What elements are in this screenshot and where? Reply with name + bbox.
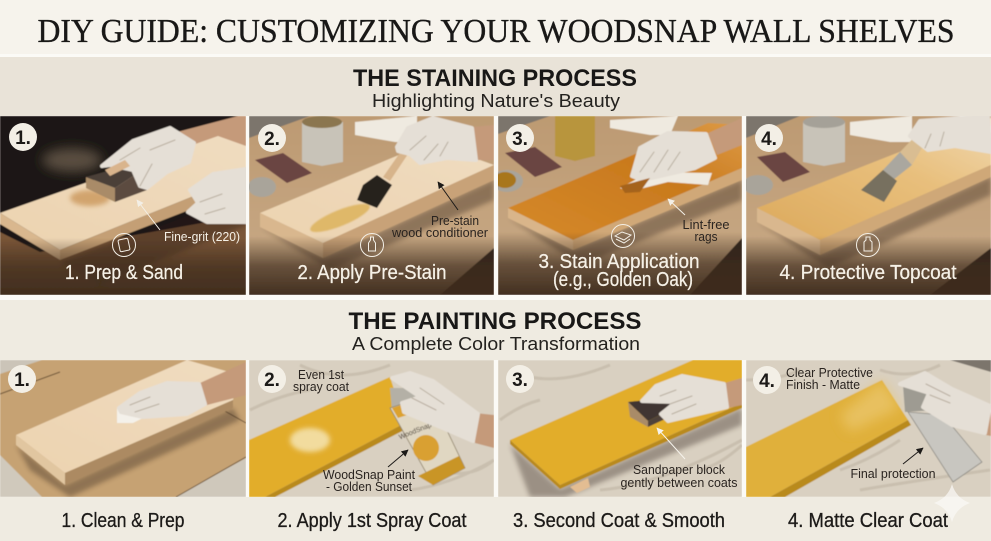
badge: step number: 4. (759, 371, 775, 392)
panel: painting step 2, apply first spray coat: WoodSnap (398, 422, 433, 441)
badge: step number (506, 365, 534, 393)
panel: staining step 1, prep and sand (0, 116, 246, 295)
badge: step number: 1. (15, 128, 31, 149)
icon: brush and can (856, 234, 880, 256)
callout: finish: Clear Protective (786, 366, 873, 380)
step label: 2. Apply Pre-Stain (298, 262, 446, 284)
callout: finish (786, 368, 872, 389)
arrow: to sanding block (657, 428, 685, 459)
callout: spray coat: spray coat (293, 380, 350, 394)
title (0, 0, 991, 54)
callout: spray coat: Even 1st (298, 368, 344, 382)
callout: rags: Lint-free (682, 218, 730, 232)
step caption: 3. Second Coat & Smooth (513, 510, 725, 532)
arrow: to rag (668, 199, 685, 215)
callout: sanding note (620, 463, 738, 490)
arrow: to conditioner (438, 182, 458, 210)
step label: 3. Stain Application (538, 251, 700, 273)
badge: step number (755, 124, 783, 152)
step label: (e.g., Golden Oak) (553, 269, 693, 291)
callout: spray coat (293, 370, 349, 394)
panel: staining step 3, stain application (491, 116, 742, 295)
badge: step number (506, 124, 534, 152)
badge: step number: 2. (264, 370, 280, 391)
section header: painting process (0, 300, 991, 360)
badge: step number: 4. (761, 129, 777, 150)
step label: 1. Prep & Sand (65, 262, 183, 284)
step caption: 4. Matte Clear Coat (788, 510, 948, 532)
badge: step number (8, 365, 36, 393)
callout: paint colour (323, 470, 415, 491)
section header: staining process: Highlighting Nature's Beauty (372, 91, 620, 111)
section header: staining process (0, 57, 991, 116)
badge: step number: 3. (512, 129, 528, 150)
arrow: to sanding block (137, 200, 160, 230)
callout: paint colour: WoodSnap Paint (323, 468, 416, 482)
panel: painting step 2, apply first spray coat (249, 360, 494, 532)
section header: painting process: A Complete Color Transformation (352, 334, 640, 354)
section header: staining process: THE STAINING PROCESS (353, 65, 637, 92)
arrow: to clear coat can (903, 448, 923, 464)
panel: staining step 4, protective topcoat (743, 116, 991, 295)
panel: painting step 1, clean and prep (0, 360, 246, 532)
badge: step number: 2. (264, 129, 280, 150)
badge: step number (9, 123, 37, 151)
panel: painting step 4, matte clear coat (746, 360, 991, 532)
badge: step number (258, 124, 286, 152)
badge: step number: 1. (14, 370, 30, 391)
step label (538, 251, 700, 291)
icon: bottle (360, 234, 384, 256)
callout: conditioner: wood conditioner (391, 226, 488, 240)
callout: rags (684, 220, 729, 244)
badge: step number: 3. (512, 370, 528, 391)
callout: finish: Finish - Matte (786, 378, 860, 392)
badge: step number (753, 366, 781, 394)
section header: painting process: THE PAINTING PROCESS (348, 308, 642, 335)
step label: 4. Protective Topcoat (780, 262, 957, 284)
callout: conditioner: Pre-stain (431, 214, 479, 228)
callout: rags: rags (694, 230, 718, 244)
step caption: 1. Clean & Prep (62, 510, 184, 532)
caption strip (0, 497, 991, 541)
callout: final protection: Final protection (850, 467, 936, 481)
icon: rags (612, 224, 634, 248)
step caption: 2. Apply 1st Spray Coat (278, 510, 467, 532)
panel: painting step 3, second coat and smooth (498, 360, 742, 532)
arrow: to spray can (388, 450, 408, 467)
icon: sparkle (934, 484, 970, 522)
callout: paint colour: - Golden Sunset (326, 480, 412, 494)
panel: staining step 2, apply pre-stain (248, 116, 494, 295)
icon: sandpaper (112, 234, 136, 256)
callout: sanding note: Sandpaper block (633, 463, 726, 477)
badge: step number (258, 365, 286, 393)
callout: conditioner (392, 216, 488, 237)
callout: grit: Fine-grit (220) (164, 230, 240, 244)
callout: sanding note: gently between coats (620, 476, 738, 490)
